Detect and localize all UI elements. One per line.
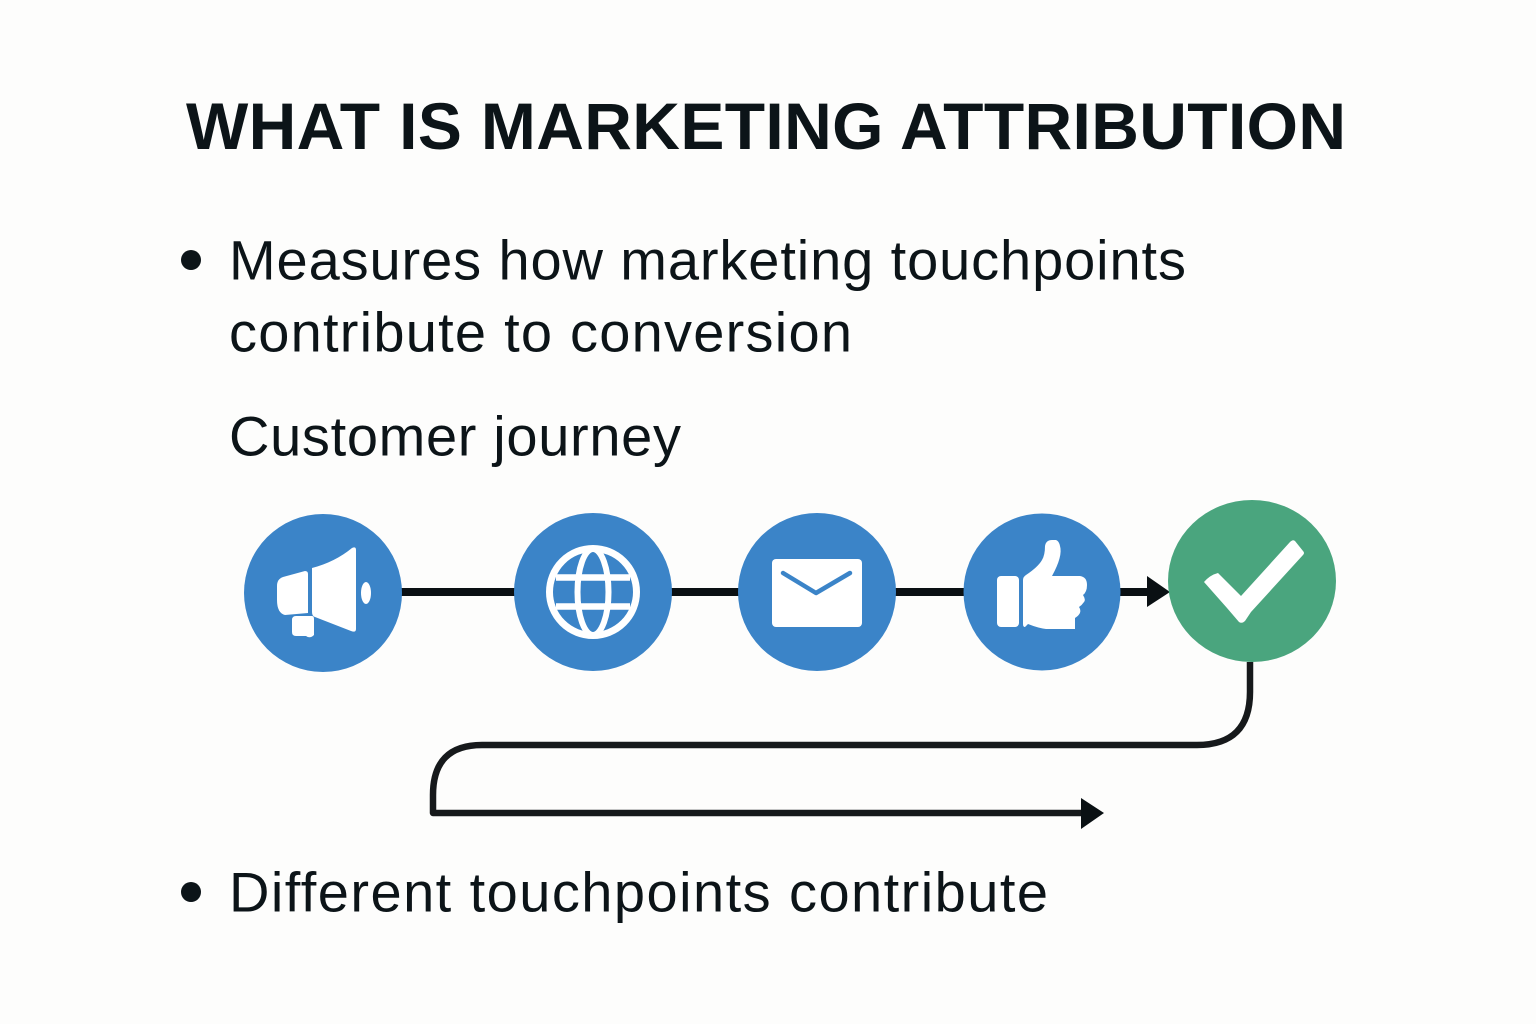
customer journey label: Customer journey xyxy=(229,404,681,468)
bullet point: definition: Measures how marketing touchpoints xyxy=(229,228,1186,292)
icon: globe xyxy=(514,513,672,671)
bullet point: definition: contribute to conversion xyxy=(229,300,852,364)
bullet point: touchpoints: Different touchpoints contribute xyxy=(229,860,1048,924)
icon: thumbs up xyxy=(964,514,1120,670)
icon: megaphone xyxy=(244,514,402,672)
icon: conversion check mark xyxy=(1168,500,1336,662)
title: WHAT IS MARKETING ATTRIBUTION xyxy=(186,89,1346,163)
arrow: journey connector line xyxy=(395,576,1170,607)
icon: email envelope xyxy=(738,513,896,671)
bullet point: definition xyxy=(181,228,1186,364)
arrow: return path xyxy=(433,662,1250,829)
